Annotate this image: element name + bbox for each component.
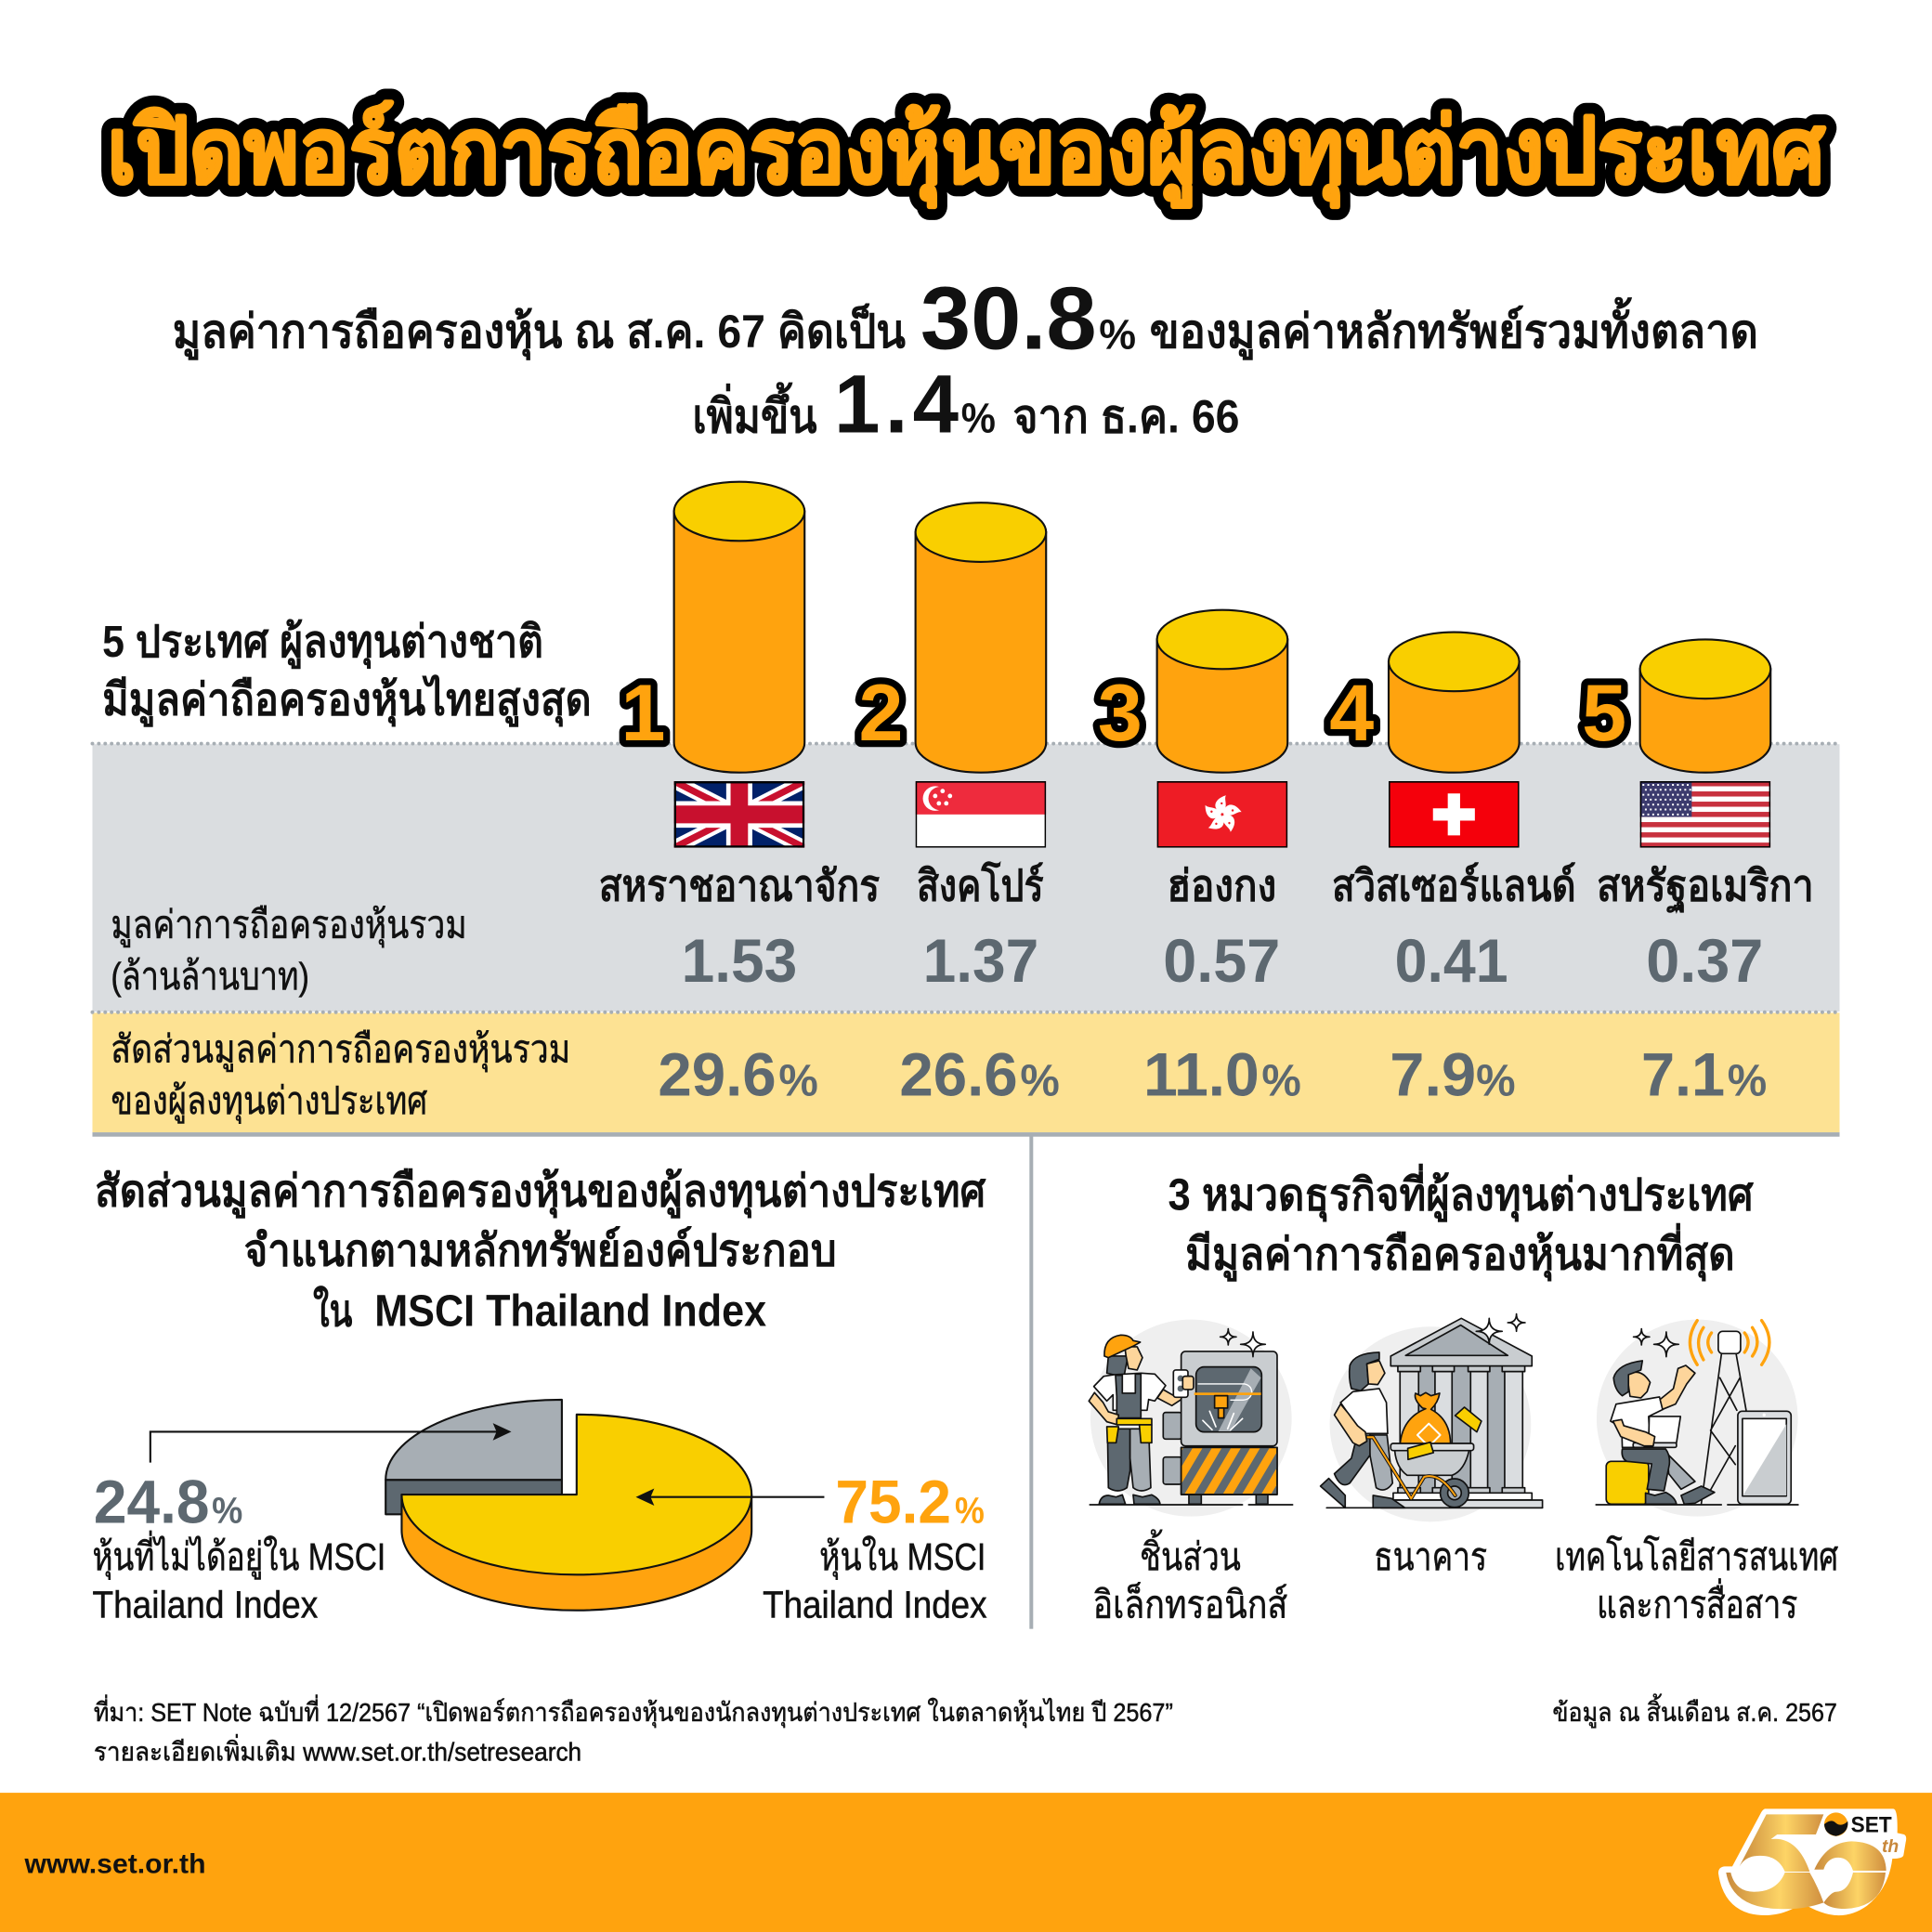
heading: MSCI share: สัดส่วนมูลค่าการถือครองหุ้นของผู้ลงทุนต่างประเทศ — [95, 1168, 986, 1220]
share percentages: 26.6 — [899, 1040, 1018, 1109]
flag: United Kingdom — [674, 781, 804, 848]
heading: MSCI share — [95, 1168, 986, 1336]
flag: Singapore — [916, 781, 1046, 848]
summary headline: 30.8 — [920, 269, 1097, 368]
row label: share of foreign holding — [111, 1027, 570, 1124]
summary headline: % — [961, 395, 996, 442]
row label: total holding value: (ล้านล้านบาท) — [111, 955, 309, 998]
heading: top 5 countries: 5 ประเทศ ผู้ลงทุนต่างชาติ — [102, 618, 543, 670]
values in trillion baht: 0.57 — [1163, 927, 1280, 996]
heading: MSCI share: จำแนกตามหลักทรัพย์องค์ประกอบ — [244, 1225, 837, 1275]
arrow: to grey slice — [150, 1423, 512, 1463]
rank numbers: 5 — [1582, 669, 1626, 758]
summary headline: เพิ่มขึ้น — [693, 382, 817, 443]
icon: electronics worker and machine — [1089, 1320, 1308, 1517]
flag: Hong Kong — [1157, 781, 1287, 848]
callout: 24.8 percent — [92, 1469, 385, 1626]
heading: top three sectors: มีมูลค่าการถือครองหุ้นมากที่สุด — [1185, 1222, 1735, 1282]
share percentages: % — [1728, 1056, 1767, 1105]
summary headline: 1.4 — [834, 359, 959, 450]
flag: Switzerland — [1389, 781, 1520, 848]
flag: United States — [1640, 781, 1770, 848]
values in trillion baht: 0.41 — [1395, 927, 1508, 996]
logo: SET 50th: th — [1882, 1837, 1899, 1857]
heading: top 5 countries: มีมูลค่าถือครองหุ้นไทยสูงสุด — [102, 673, 592, 727]
country names: สหรัฐอเมริกา — [1597, 862, 1814, 914]
callout: 75.2 percent: หุ้นใน MSCI — [819, 1534, 986, 1580]
sector labels — [1093, 1529, 1838, 1626]
callout: 24.8 percent: หุ้นที่ไม่ได้อยู่ใน MSCI — [92, 1531, 385, 1580]
callout: 24.8 percent: Thailand Index — [92, 1584, 319, 1626]
callout: 75.2 percent: % — [955, 1491, 985, 1532]
country names: สวิสเซอร์แลนด์ — [1332, 862, 1576, 910]
row label: total holding value — [111, 903, 467, 998]
title: เปิดพอร์ตการถือครองหุ้นของผู้ลงทุนต่างประเทศ — [107, 99, 1826, 208]
sector labels: อิเล็กทรอนิกส์ — [1093, 1583, 1287, 1626]
icon: telecom technician and tower — [1596, 1320, 1798, 1517]
country names: สหราชอาณาจักร — [599, 862, 880, 910]
logo: SET 50th — [1718, 1808, 1906, 1915]
row label: share of foreign holding: ของผู้ลงทุนต่างประเทศ — [111, 1079, 427, 1124]
callout: 24.8 percent: 24.8 — [94, 1469, 210, 1537]
callout: 75.2 percent: Thailand Index — [763, 1584, 987, 1626]
row label: share of foreign holding: สัดส่วนมูลค่าการถือครองหุ้นรวม — [111, 1027, 570, 1072]
heading: top three sectors: 3 หมวดธุรกิจที่ผู้ลงทุนต่างประเทศ — [1168, 1164, 1754, 1223]
share percentages: % — [1476, 1056, 1516, 1105]
summary headline — [173, 269, 1758, 450]
values in trillion baht: 1.37 — [923, 927, 1038, 996]
share percentages — [658, 1040, 1767, 1109]
callout: 24.8 percent: % — [212, 1491, 242, 1532]
summary headline: ของมูลค่าหลักทรัพย์รวมทั้งตลาด — [1150, 296, 1758, 360]
icon: bank with wheelbarrow — [1321, 1314, 1543, 1521]
rank numbers: 2 — [858, 669, 903, 758]
title: เปิดพอร์ตการถือครองหุ้นของผู้ลงทุนต่างประเทศ — [107, 99, 1826, 208]
source note — [94, 1693, 1837, 1767]
heading: MSCI share: MSCI Thailand Index — [374, 1286, 766, 1336]
rank numbers: 4 — [1329, 669, 1374, 758]
country names: ฮ่องกง — [1167, 862, 1276, 910]
callout: 75.2 percent: 75.2 — [835, 1469, 951, 1537]
heading: MSCI share: ใน — [313, 1285, 353, 1336]
arrow: to yellow slice — [635, 1488, 824, 1506]
bar: rank 4 cylinder — [1389, 633, 1520, 773]
country names — [599, 860, 1814, 914]
rank numbers: 3 — [1098, 669, 1142, 758]
row label: total holding value: มูลค่าการถือครองหุ้นรวม — [111, 903, 467, 947]
share percentages: 7.9 — [1390, 1040, 1476, 1109]
values in trillion baht: 1.53 — [682, 927, 797, 996]
pie slice: in MSCI 75.2% — [401, 1415, 751, 1611]
heading: top 5 countries — [102, 618, 592, 727]
share percentages: % — [1261, 1056, 1301, 1105]
callout: 75.2 percent — [763, 1469, 987, 1626]
sector labels: เทคโนโลยีสารสนเทศ — [1555, 1535, 1838, 1578]
sector labels: ชิ้นส่วน — [1140, 1529, 1241, 1578]
bar: rank 1 cylinder — [674, 482, 804, 773]
source note: ที่มา: SET Note ฉบับที่ 12/2567 “เปิดพอร์ตการถือครองหุ้นของนักลงทุนต่างประเทศ ในตลาดหุ้นไทย ปี 2567” — [94, 1694, 1173, 1729]
bar: rank 2 cylinder — [916, 503, 1046, 773]
heading: top three sectors — [1168, 1164, 1754, 1282]
panel: grey table background — [92, 744, 1840, 1012]
sector labels: ธนาคาร — [1374, 1535, 1487, 1578]
share percentages: 7.1 — [1641, 1040, 1725, 1109]
source note: รายละเอียดเพิ่มเติม www.set.or.th/setresearch — [94, 1734, 581, 1767]
rank numbers: 1 — [620, 669, 665, 758]
rank numbers — [620, 669, 1626, 758]
share percentages: 11.0 — [1143, 1040, 1260, 1109]
pie chart — [385, 1400, 751, 1611]
footer website: www.set.or.th — [23, 1849, 206, 1879]
footer band — [0, 1793, 1932, 1932]
values in trillion baht — [682, 927, 1763, 996]
pie slice: outside MSCI 24.8% — [385, 1400, 562, 1514]
sector labels: และการสื่อสาร — [1597, 1579, 1797, 1626]
share percentages: % — [1020, 1056, 1060, 1105]
panel: yellow share row — [92, 1012, 1840, 1132]
bar: rank 5 cylinder — [1640, 639, 1770, 773]
country names: สิงคโปร์ — [917, 860, 1044, 910]
summary headline: % — [1099, 310, 1136, 358]
logo: SET 50th: SET — [1851, 1813, 1892, 1838]
share percentages: % — [778, 1056, 818, 1105]
values in trillion baht: 0.37 — [1646, 927, 1763, 996]
bar: rank 3 cylinder — [1157, 610, 1287, 773]
summary headline: จาก ธ.ค. 66 — [1012, 390, 1239, 443]
share percentages: 29.6 — [658, 1040, 777, 1109]
summary headline: มูลค่าการถือครองหุ้น ณ ส.ค. 67 คิดเป็น — [173, 303, 907, 360]
source note: ข้อมูล ณ สิ้นเดือน ส.ค. 2567 — [1552, 1693, 1837, 1729]
